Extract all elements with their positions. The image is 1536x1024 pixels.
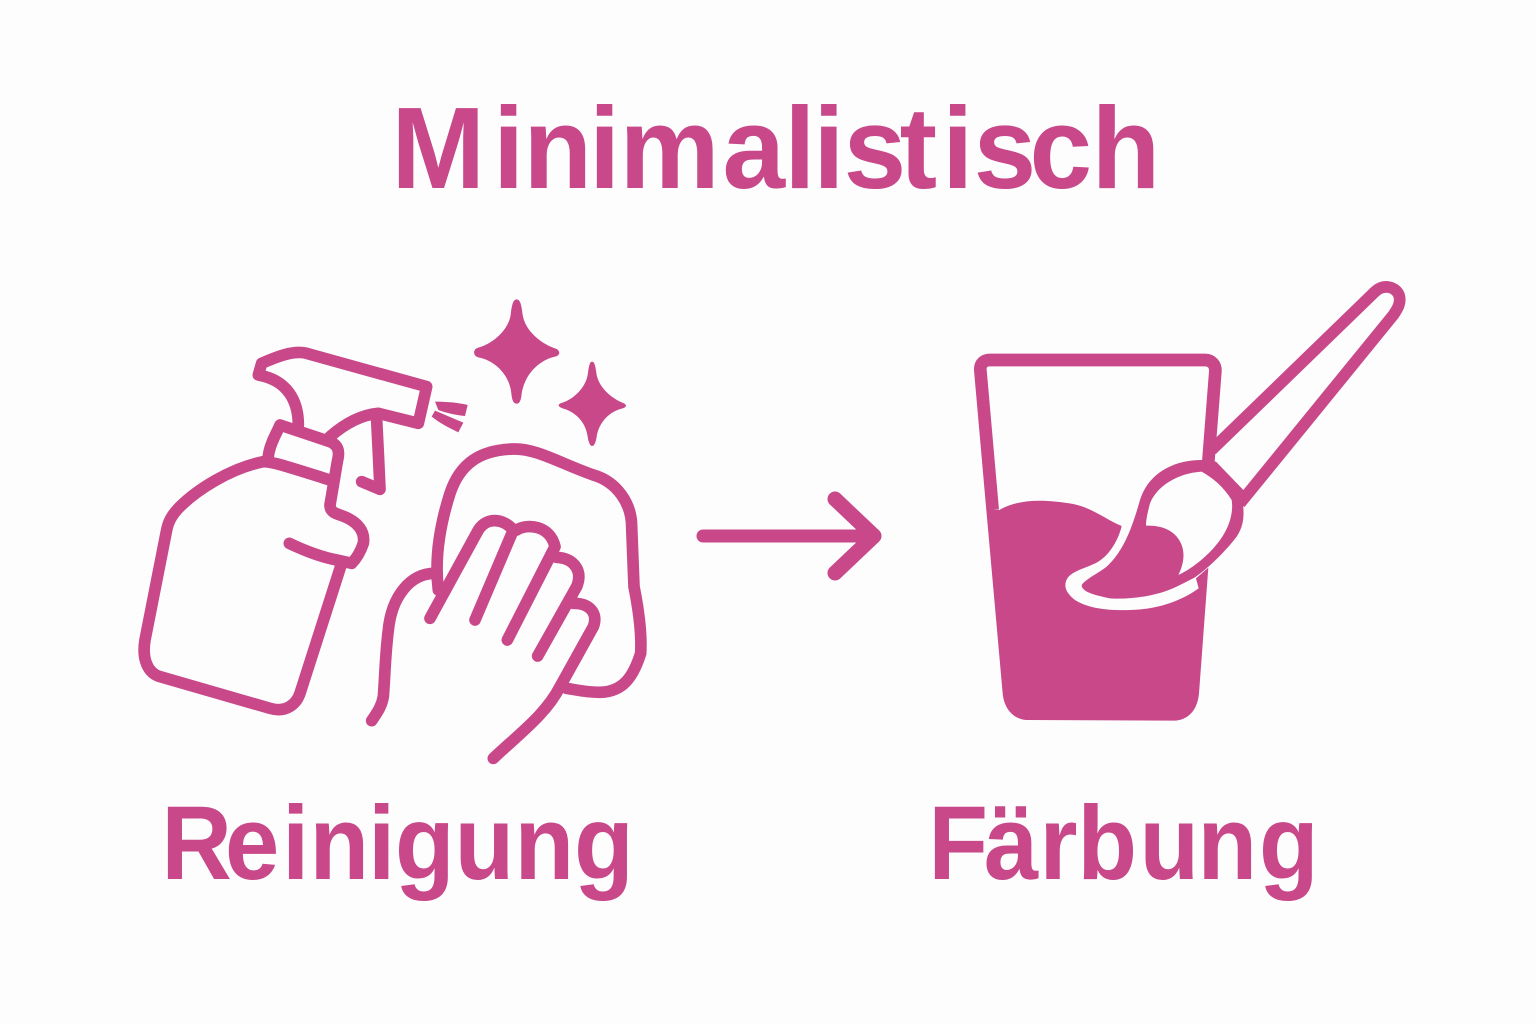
label: Reinigung: Reinigung: [161, 785, 634, 902]
icon: spray droplets: [432, 402, 468, 432]
icon: paint brush: [1082, 287, 1400, 599]
icon: spray bottle: [144, 352, 427, 710]
title: Minimalistisch: [391, 84, 1160, 213]
icon: glass with dye: [980, 360, 1215, 721]
icon: hand with cloth: [372, 449, 641, 758]
icon: sparkle large: [474, 299, 559, 404]
label: Färbung: Färbung: [928, 785, 1319, 902]
icon: sparkle small: [559, 362, 626, 446]
arrow: [703, 499, 874, 573]
